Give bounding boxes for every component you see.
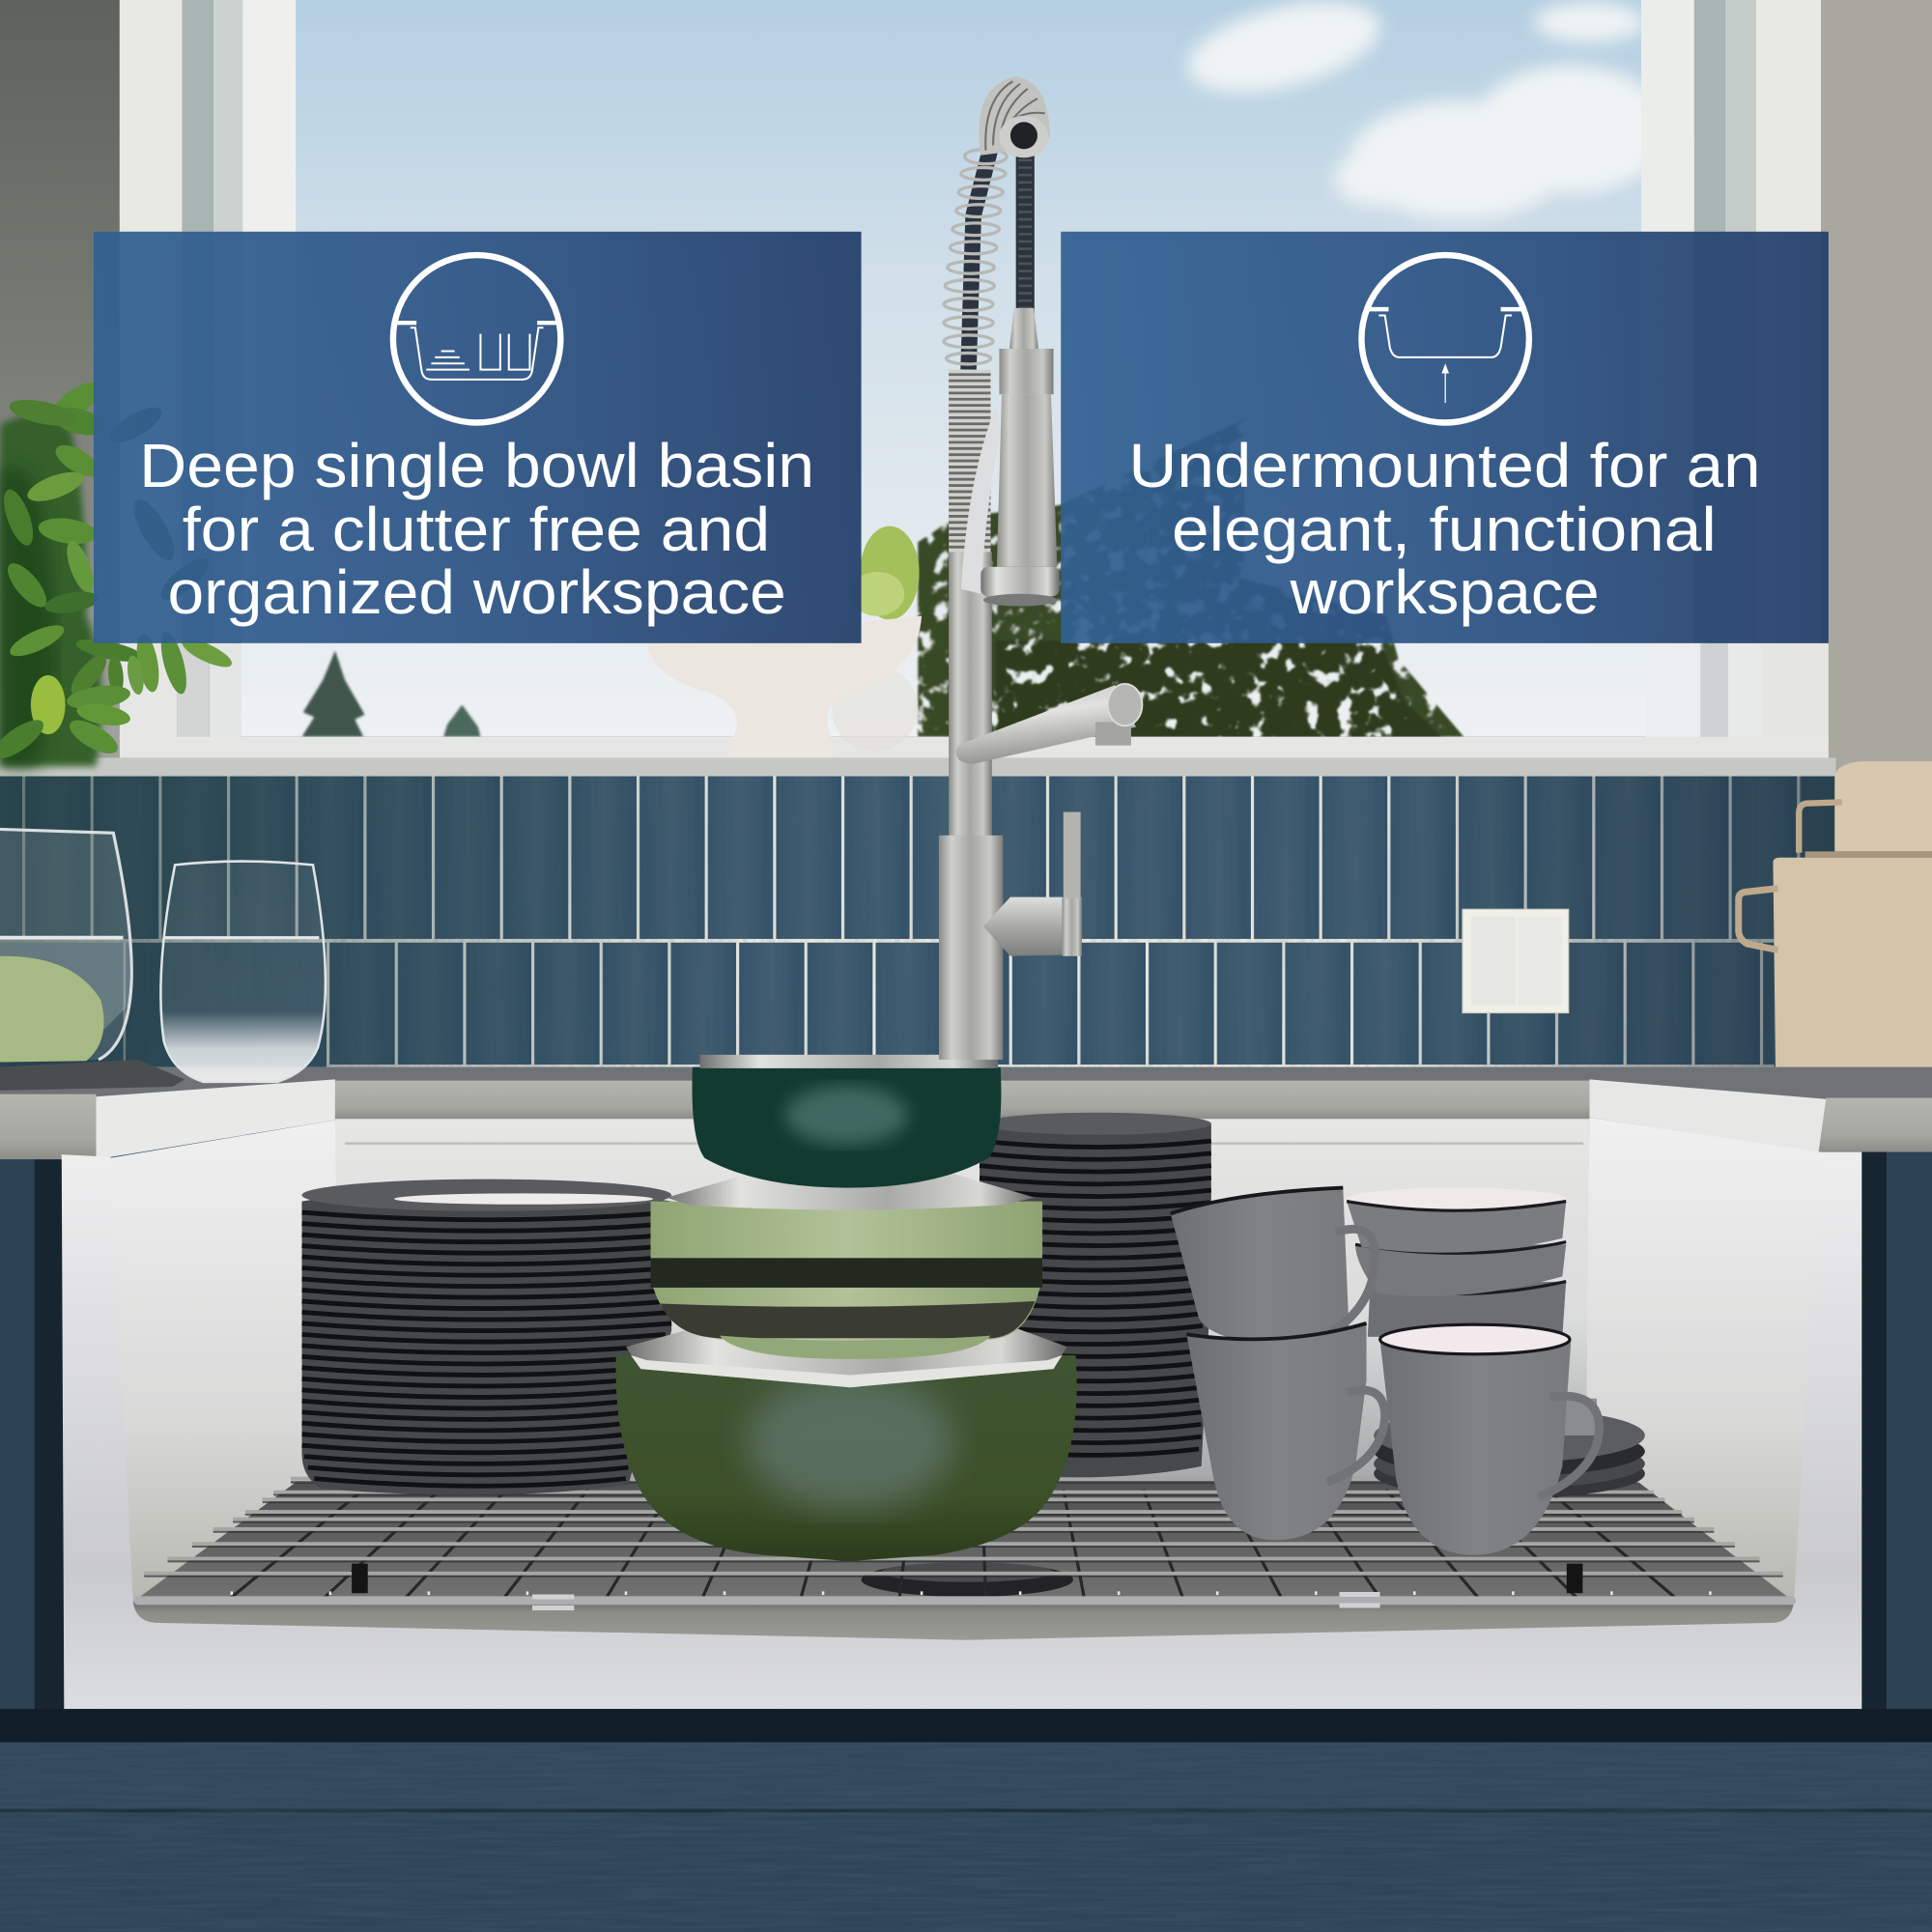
window sill bbox=[0, 737, 1836, 777]
faucet bbox=[939, 76, 1142, 1060]
heading right bbox=[1128, 431, 1761, 627]
mug front right bbox=[1380, 1324, 1600, 1555]
mug front left bbox=[1186, 1323, 1385, 1540]
sink right wall bbox=[1586, 1118, 1821, 1629]
bowl top dark green bbox=[692, 1055, 1001, 1188]
faucet base bbox=[939, 836, 1003, 1060]
cabinets right bbox=[1861, 1152, 1932, 1741]
icon: sink with dishes bbox=[393, 255, 560, 423]
bottom cabinet bbox=[0, 1709, 1932, 1932]
faucet spray head bbox=[980, 308, 1060, 607]
heading left: Deep single bowl basin bbox=[139, 431, 814, 500]
left glass with lime bbox=[0, 829, 131, 1062]
wall switch bbox=[1463, 909, 1569, 1012]
plate stack right bbox=[980, 1113, 1211, 1477]
faucet holder arc bbox=[961, 407, 1001, 594]
heading left bbox=[139, 431, 814, 627]
counter back bbox=[335, 1081, 1589, 1119]
faucet spout arm bbox=[956, 685, 1136, 764]
sink basin bbox=[62, 1118, 1861, 1709]
fruit bowl with apples bbox=[647, 526, 922, 756]
cabinets left bbox=[0, 1159, 64, 1741]
sink left wall bbox=[108, 1120, 339, 1629]
folded cloth bbox=[0, 1060, 185, 1091]
wall right bbox=[1821, 0, 1932, 777]
beige canisters bbox=[1739, 761, 1932, 1070]
bowl middle light green bbox=[650, 1175, 1042, 1359]
backsplash tiles bbox=[0, 777, 1838, 1068]
back wall step line bbox=[345, 1142, 1583, 1145]
wall left bbox=[0, 0, 120, 777]
faucet aerator bbox=[1095, 684, 1142, 746]
panel: deep single bowl basin bbox=[94, 232, 862, 643]
heading left: for a clutter free and bbox=[183, 495, 770, 564]
mug back tilted bbox=[1171, 1188, 1375, 1343]
window view bbox=[242, 0, 1708, 737]
plant bbox=[0, 375, 235, 766]
heading right: elegant, functional bbox=[1172, 495, 1717, 564]
heading left: organized workspace bbox=[167, 557, 786, 627]
back wall bbox=[335, 1119, 1589, 1489]
wire dish rack bbox=[138, 1479, 1792, 1608]
counter right bbox=[1589, 1079, 1932, 1152]
plate stack left bbox=[301, 1179, 671, 1495]
faucet coil spring bbox=[944, 138, 1007, 370]
faucet pole bbox=[949, 552, 992, 838]
sink floor bbox=[133, 1482, 1794, 1645]
faucet coil dome bbox=[979, 76, 1050, 157]
icon: undermount sink with arrow bbox=[1361, 255, 1529, 423]
grey bowls stack bbox=[1347, 1188, 1566, 1337]
sink front frame bbox=[62, 1152, 1861, 1709]
panel: undermounted bbox=[1061, 232, 1829, 643]
drain bbox=[862, 1562, 1073, 1597]
faucet tight coil bbox=[949, 370, 991, 554]
window frame right bbox=[1641, 0, 1829, 739]
plates behind right mugs bbox=[1374, 1399, 1645, 1498]
window frame left bbox=[120, 0, 296, 739]
water glass bbox=[160, 862, 326, 1082]
bowl bottom olive bbox=[616, 1328, 1077, 1561]
faucet handle bbox=[983, 812, 1082, 956]
faucet hose bbox=[1018, 137, 1033, 314]
clouds bbox=[1179, 0, 1669, 219]
heading right: Undermounted for an bbox=[1128, 431, 1761, 500]
heading right: workspace bbox=[1289, 557, 1600, 627]
trees bbox=[301, 419, 1463, 737]
counter left bbox=[0, 1079, 335, 1159]
countertop back bbox=[0, 1067, 1932, 1099]
